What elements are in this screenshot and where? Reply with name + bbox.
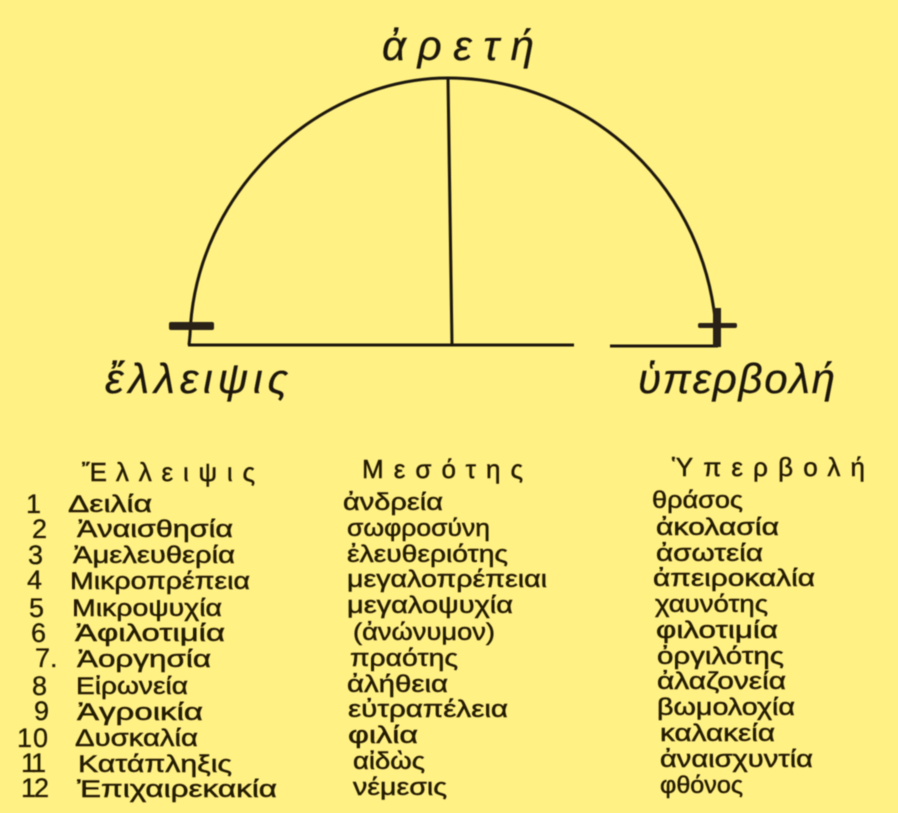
row numbers: [17, 489, 58, 803]
row numbers: 10: [17, 723, 48, 753]
list: means: μεγαλοψυχία: [347, 592, 513, 619]
label: deficiency: ἔλλειψις: [105, 355, 289, 402]
list: means: πραότης: [350, 645, 458, 672]
arc: curve from deficiency to excess: [189, 78, 717, 345]
list: excesses: καλακεία: [660, 720, 775, 747]
row numbers: 7.: [35, 643, 58, 673]
list: deficiencies: Μικροπρέπεια: [70, 568, 250, 595]
list: excesses: θράσος: [652, 487, 743, 514]
list: deficiencies: Εἰρωνεία: [76, 673, 188, 700]
list: means: σωφροσύνη: [347, 515, 490, 542]
column: mean: [343, 454, 547, 801]
list: deficiencies: Ἀγροικία: [77, 699, 203, 726]
list: excesses: ἀπειροκαλία: [653, 565, 815, 592]
row numbers: 8: [32, 671, 47, 701]
row numbers: 4: [27, 565, 42, 595]
list: excesses: ἀλαζονεία: [657, 668, 786, 695]
list: deficiencies: Δυσκαλία: [75, 725, 198, 752]
list: means: φιλία: [348, 722, 418, 749]
icon: plus sign: [698, 308, 737, 347]
diagram: virtue arc: [105, 22, 835, 402]
row numbers: 5: [29, 593, 44, 623]
column: deficiency: [17, 457, 277, 803]
list: excesses: [652, 487, 815, 799]
row numbers: 1: [26, 489, 41, 519]
row numbers: 11: [21, 748, 46, 778]
list: excesses: ἀσωτεία: [656, 540, 763, 567]
row numbers: 6: [31, 618, 46, 648]
heading: deficiency: Ἔλλειψις: [82, 457, 255, 487]
heading: excess: Ὑπερβολή: [672, 452, 865, 482]
list: deficiencies: Ἀμελευθερία: [73, 542, 235, 569]
list: means: νέμεσις: [353, 774, 447, 801]
icon: minus sign: [169, 322, 214, 330]
list: deficiencies: [68, 491, 277, 803]
list: means: ἐλευθεριότης: [347, 541, 508, 568]
list: deficiencies: Δειλία: [68, 491, 152, 518]
list: excesses: φιλοτιμία: [656, 617, 778, 644]
column: excess: [652, 452, 865, 799]
row numbers: 2: [32, 514, 47, 544]
list: means: [343, 489, 547, 801]
list: excesses: ὀργιλότης: [657, 643, 784, 670]
list: excesses: ἀναισχυντία: [660, 746, 813, 773]
list: means: εὐτραπέλεια: [348, 696, 508, 723]
row numbers: 12: [21, 773, 49, 803]
list: deficiencies: Ἀναισθησία: [77, 516, 233, 543]
list: deficiencies: Ἀοργησία: [77, 646, 211, 673]
list: means: μεγαλοπρέπειαι: [347, 566, 547, 593]
list: excesses: φθόνος: [660, 772, 743, 799]
label: excess: ὑπερβολή: [638, 355, 835, 402]
list: means: ἀνδρεία: [343, 489, 443, 516]
label: virtue: ἀρετή: [382, 22, 534, 69]
heading: mean: Μεσότης: [362, 454, 523, 484]
list: excesses: ἀκολασία: [656, 514, 779, 541]
list: deficiencies: Κατάπληξις: [78, 751, 232, 778]
list: excesses: χαυνότης: [655, 591, 768, 618]
list: means: ἀλήθεια: [347, 671, 448, 698]
list: excesses: βωμολοχία: [657, 694, 795, 721]
list: deficiencies: Ἐπιχαιρεκακία: [77, 776, 277, 803]
line: left baseline: [188, 344, 574, 346]
list: means: (ἀνώνυμον): [353, 619, 495, 646]
line: central axis: [448, 78, 452, 345]
list: deficiencies: Μικροψυχία: [72, 595, 222, 622]
list: means: αἰδὼς: [353, 748, 425, 775]
row numbers: 3: [28, 540, 43, 570]
list: deficiencies: Ἀφιλοτιμία: [75, 620, 225, 647]
row numbers: 9: [34, 696, 49, 726]
line: right baseline: [610, 344, 718, 348]
